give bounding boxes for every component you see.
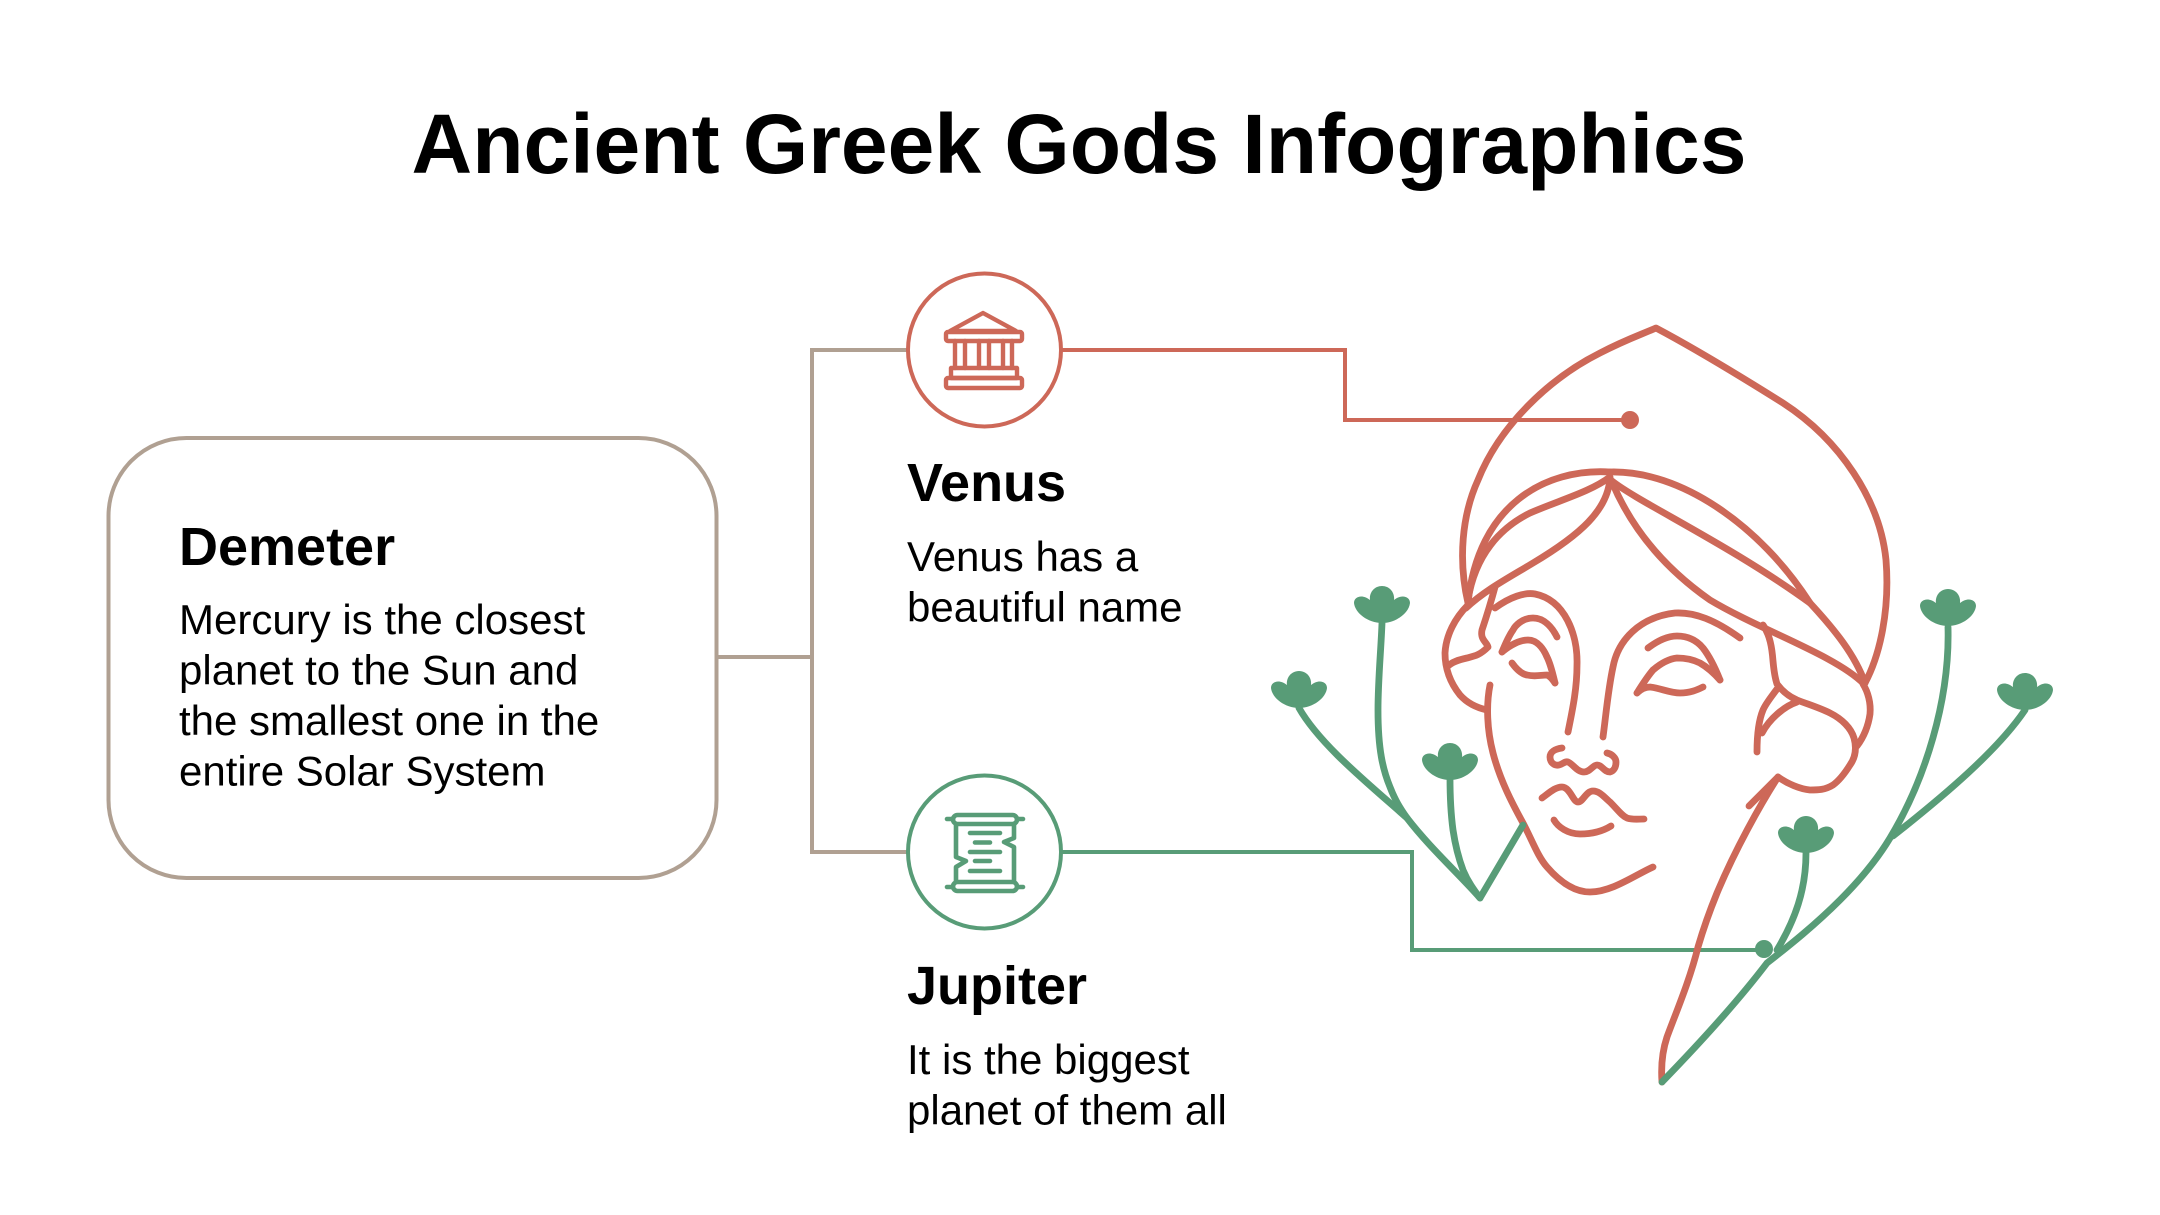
left eye (1502, 618, 1557, 683)
flower (1997, 673, 2053, 710)
flower (1271, 671, 1327, 708)
text block: venus description: beautiful name (907, 584, 1183, 630)
connector: jupiter to flower (1062, 852, 1773, 958)
panel: demeter (108, 438, 716, 878)
text block: jupiter description: It is the biggest (907, 1036, 1190, 1083)
text block: venus description (907, 533, 1183, 630)
text block: jupiter description (907, 1036, 1227, 1134)
head covering (1463, 328, 1887, 683)
icon: scroll in circle (908, 776, 1061, 928)
ear and neck (1662, 625, 1870, 1082)
connector: venus to head (1062, 350, 1639, 429)
lips (1542, 787, 1644, 834)
heading: jupiter: Jupiter (907, 956, 1087, 1016)
icon: temple in circle (908, 274, 1061, 426)
text block: demeter description (179, 596, 599, 794)
temple hair and ear (1445, 587, 1495, 710)
nose tip (1550, 748, 1616, 772)
jaw line (1488, 685, 1653, 892)
connector: tan tree (717, 350, 908, 852)
text block: demeter description: the smallest one in the (179, 697, 599, 744)
illustration: green right plant (1662, 589, 2053, 1082)
text block: venus description: Venus has a (907, 533, 1139, 580)
text block: demeter description: planet to the Sun and (179, 646, 578, 694)
flower (1354, 586, 1410, 623)
text block: jupiter description: planet of them all (907, 1086, 1227, 1134)
text block: demeter description: entire Solar System (179, 748, 545, 794)
illustration: green left plant (1271, 586, 1523, 898)
flower (1778, 816, 1834, 853)
illustration: greek head line art (1445, 328, 1887, 1082)
heading: venus: Venus (907, 453, 1066, 513)
title: Ancient Greek Gods Infographics (412, 97, 1746, 191)
flower (1920, 589, 1976, 626)
heading: demeter: Demeter (179, 517, 395, 577)
hair strands (1466, 472, 1865, 684)
text block: demeter description: Mercury is the closest (179, 596, 585, 643)
brows and nose (1495, 594, 1740, 737)
right eye (1637, 636, 1720, 693)
flower (1422, 743, 1478, 780)
